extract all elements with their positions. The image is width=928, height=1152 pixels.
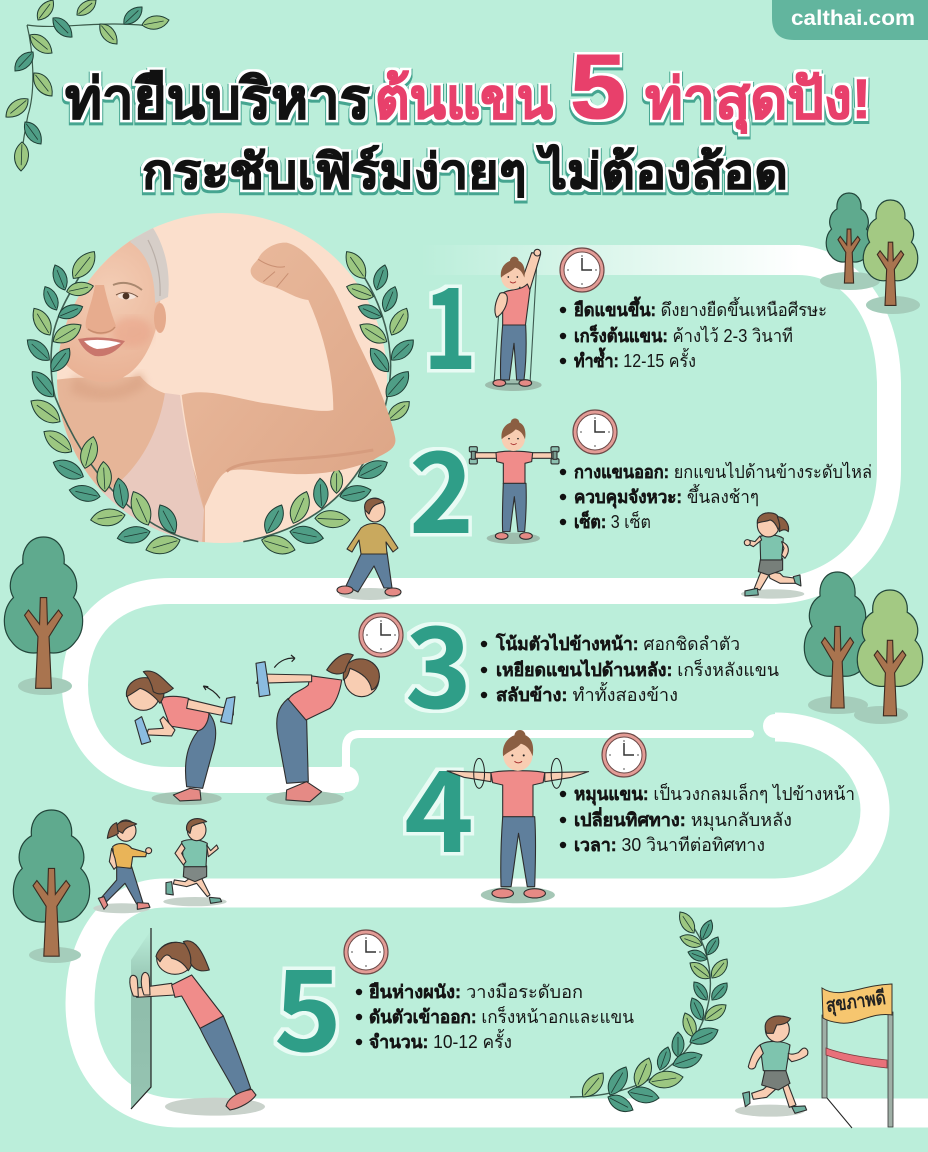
bullet list: กางแขนออก: ยกแขนไปด้านข้างระดับไหล่: [574, 461, 872, 482]
panel: hero photo with laurel wreath: [23, 213, 418, 558]
bullet list: เกร็งต้นแขน: ค้างไว้ 2-3 วินาที: [574, 324, 793, 346]
bullet list: โน้มตัวไปข้างหน้า: ศอกชิดลำตัว: [495, 633, 740, 654]
woman torso and face: [50, 228, 205, 545]
number 3: 3: [405, 579, 472, 741]
step 1: [423, 240, 827, 402]
laurel left: [23, 247, 198, 558]
figure: resistance band: [485, 249, 542, 391]
title: 5: [570, 36, 626, 138]
figure: triceps kickback left: [126, 671, 235, 805]
figure: walking boy: [337, 498, 401, 600]
number 2: 2: [409, 404, 474, 566]
bullet list: [560, 461, 872, 532]
step 5: [130, 922, 634, 1116]
bullet list: เวลา: 30 วินาทีต่อทิศทาง: [574, 835, 765, 855]
bullet list: เหยียดแขนไปด้านหลัง: เกร็งหลังแขน: [496, 658, 779, 680]
icon: clock: [602, 733, 646, 777]
tree: left lower: [13, 810, 90, 963]
laurel right: [243, 247, 418, 558]
winding white road: [75, 245, 928, 1113]
icon: clock: [573, 410, 617, 454]
figure: arm circles: [447, 730, 589, 903]
tree: left middle: [4, 537, 83, 695]
title: ท่ายืนบริหาร: [65, 67, 370, 130]
bullet list: ดันตัวเข้าออก: เกร็งหน้าอกและแขน: [369, 1005, 634, 1027]
flexed arm: [182, 243, 395, 508]
bullet list: ทำซ้ำ: 12-15 ครั้ง: [574, 347, 696, 371]
icon: clock: [560, 248, 604, 292]
finish ribbon: [826, 1048, 887, 1068]
bullet list: ควบคุมจังหวะ: ขึ้นลงช้าๆ: [574, 484, 759, 509]
finish banner: [822, 984, 892, 1023]
bullet list: สลับข้าง: ทำทั้งสองข้าง: [496, 682, 678, 705]
number 5: 5: [274, 922, 342, 1084]
icon: top-left vine: [2, 0, 170, 171]
bullet list: ยืดแขนขึ้น: ดึงยางยืดขึ้นเหนือศีรษะ: [574, 296, 827, 320]
step 2: [409, 404, 872, 566]
tree pair: top right: [820, 193, 920, 314]
bullet list: เซ็ต: 3 เซ็ต: [574, 510, 651, 532]
figure: dumbbell raises: [469, 418, 559, 544]
icon: clock: [344, 930, 388, 974]
number 4: 4: [404, 723, 474, 885]
title: [65, 36, 871, 199]
number 1: 1: [423, 240, 477, 402]
step 4: [404, 723, 855, 903]
finish gate: สุขภาพดี: [825, 987, 887, 1018]
figure: running girl: [741, 513, 804, 599]
wall: [131, 928, 151, 1109]
tree pair: right middle: [804, 572, 923, 724]
figure: two joggers: [93, 819, 227, 913]
bullet list: [481, 633, 779, 705]
figure: triceps kickback right: [256, 654, 379, 806]
logo tab: [772, 0, 928, 40]
bullet list: [560, 296, 827, 371]
bullet list: จำนวน: 10-12 ครั้ง: [369, 1029, 512, 1052]
bullet list: ยืนห่างผนัง: วางมือระดับอก: [369, 982, 583, 1002]
title: กระชับเฟิร์มง่ายๆ ไม่ต้องส้อด: [142, 143, 788, 199]
figure: wall push-up: [130, 941, 265, 1116]
bullet list: [356, 982, 634, 1052]
title: ต้นแขน: [375, 67, 553, 130]
bullet list: [560, 782, 855, 855]
logo tab: calthai.com: [791, 7, 915, 30]
figure: boy at finish: [735, 1016, 808, 1117]
finish gate: [822, 984, 893, 1128]
icon: clock: [359, 613, 403, 657]
title: ท่าสุดปัง!: [645, 67, 871, 134]
bullet list: เปลี่ยนทิศทาง: หมุนกลับหลัง: [574, 807, 792, 831]
icon: laurel branch: [570, 909, 732, 1116]
step 3: [126, 579, 779, 806]
bullet list: หมุนแขน: เป็นวงกลมเล็กๆ ไปข้างหน้า: [574, 782, 855, 806]
